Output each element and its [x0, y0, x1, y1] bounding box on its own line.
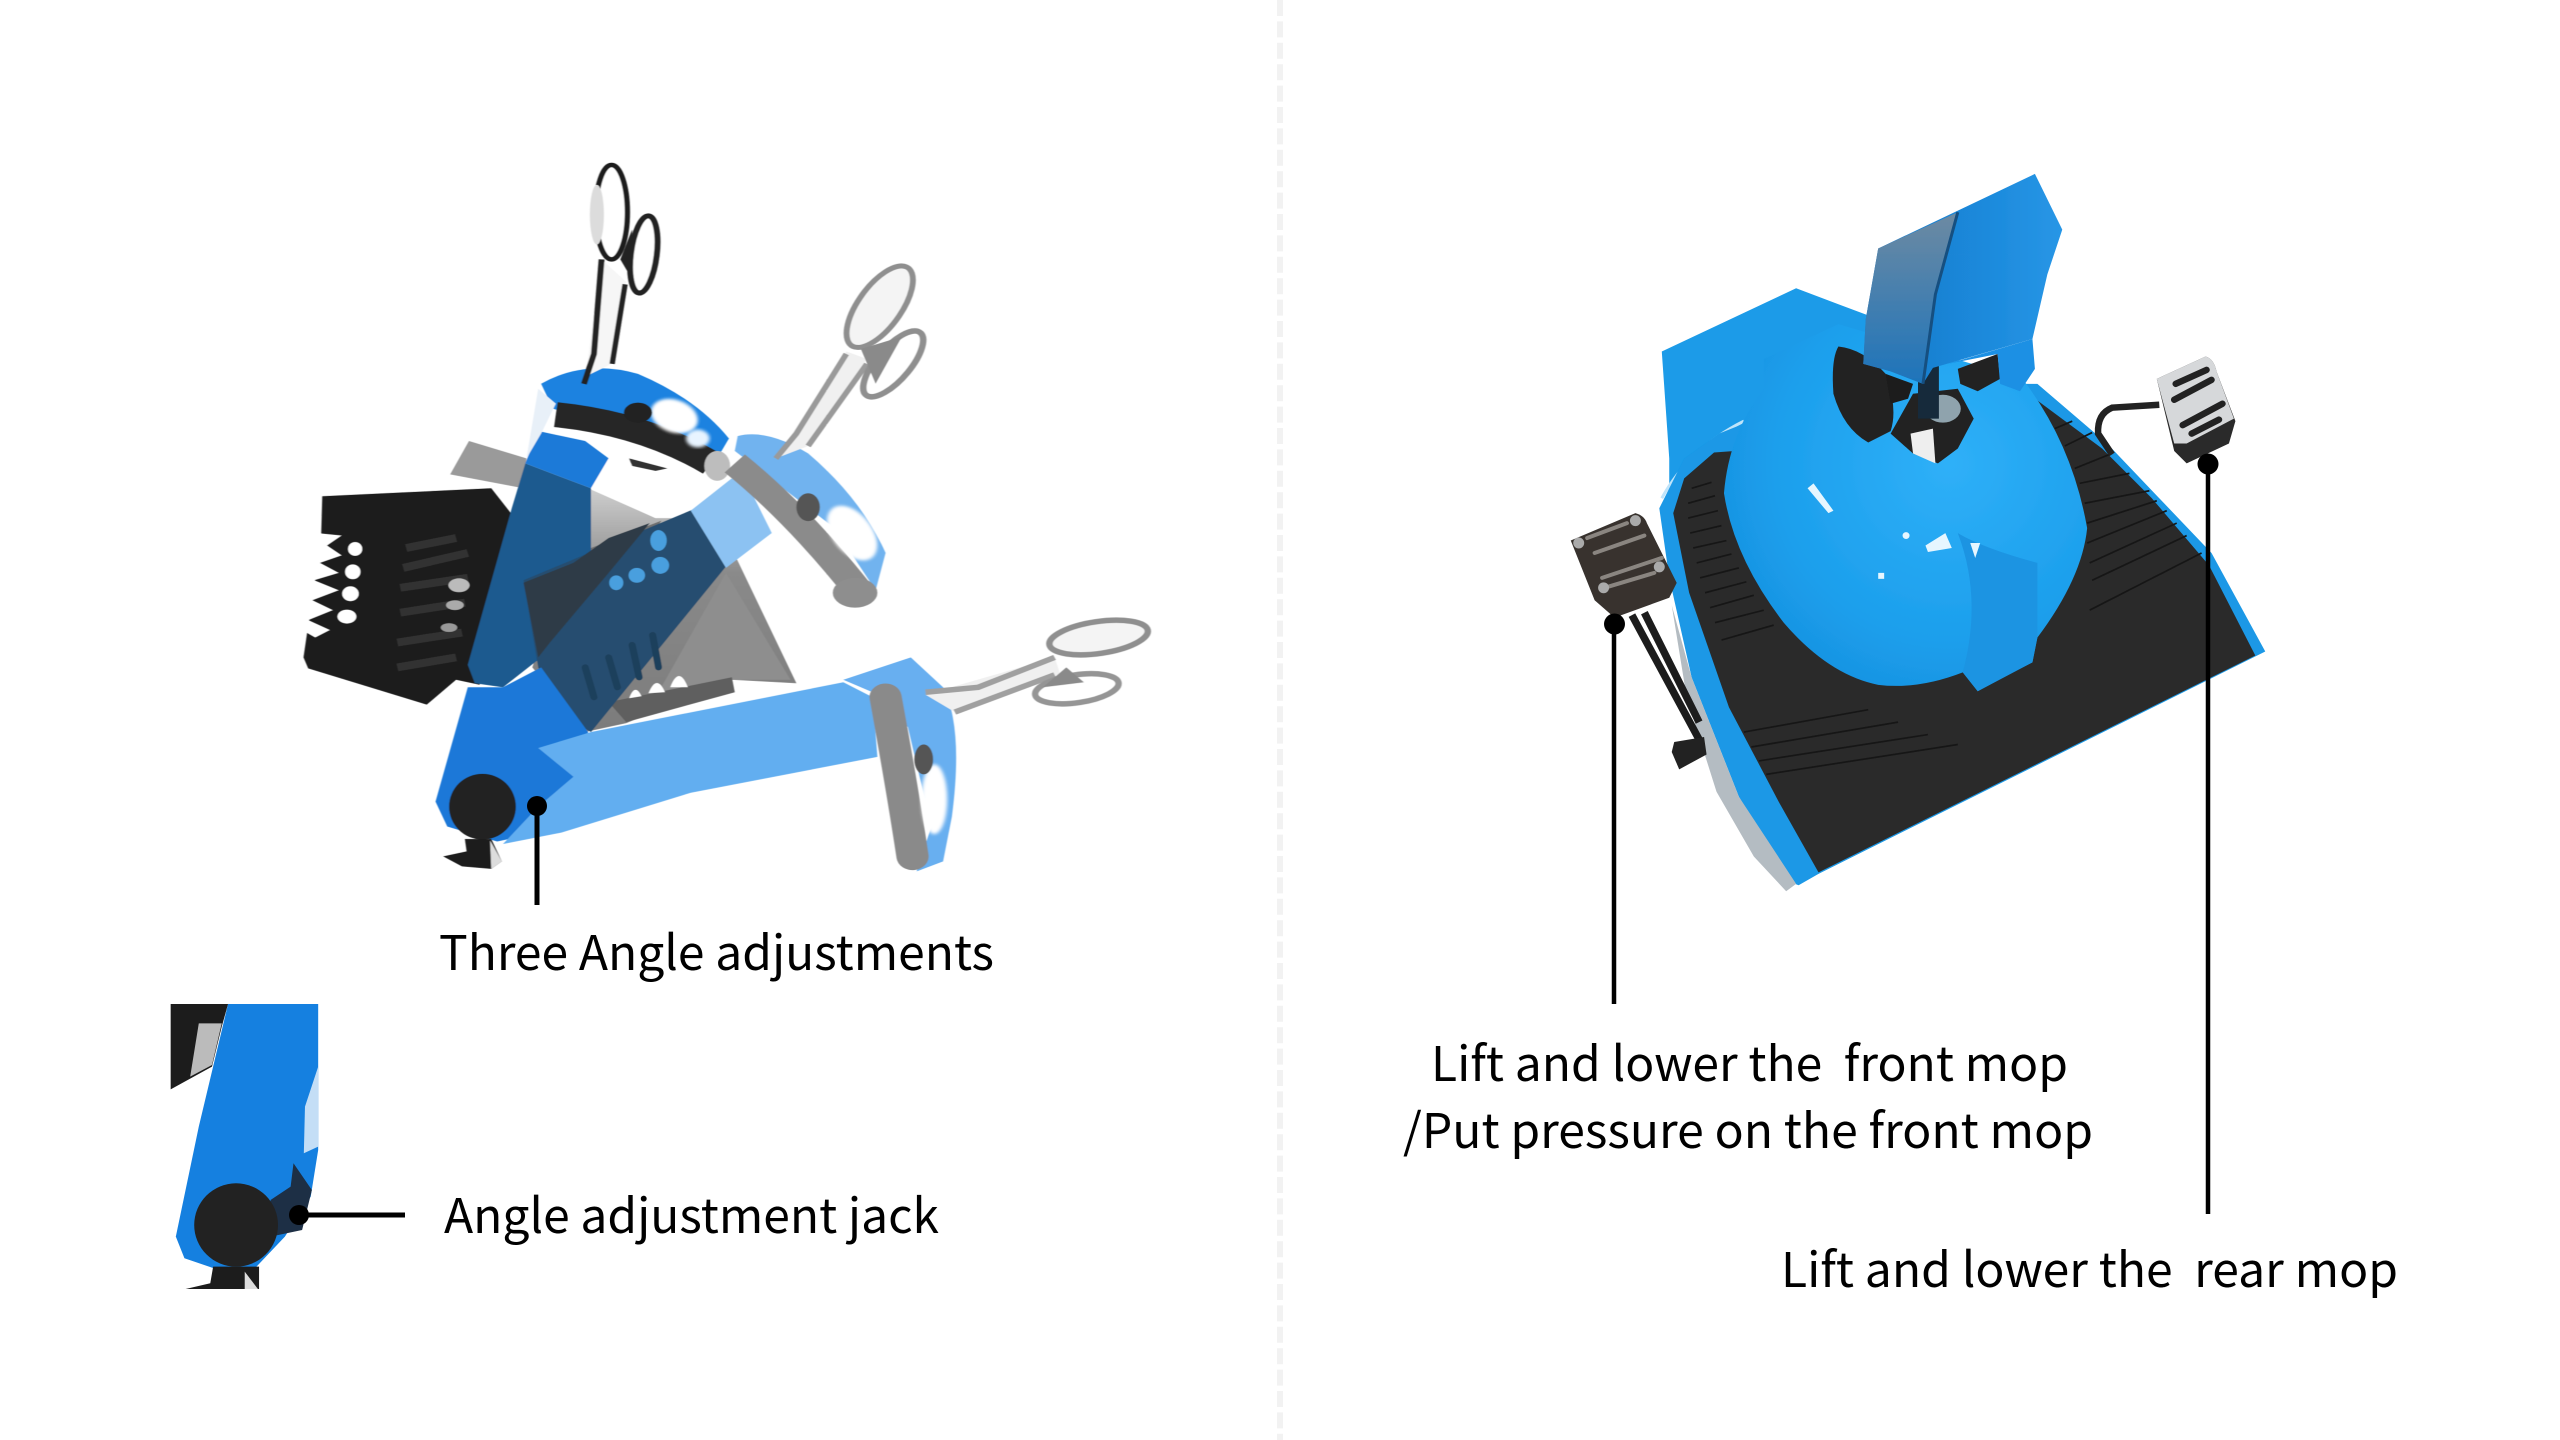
rear blue slab	[1662, 288, 1878, 498]
dark blue basket panel, upright position	[468, 463, 591, 687]
inset blue arm	[176, 1004, 318, 1270]
inset dark corner	[171, 1004, 228, 1089]
label: three angle adjustments: Three Angle adjustments	[439, 914, 994, 984]
black rear basket	[303, 488, 515, 705]
black ribbed mat	[1673, 391, 2255, 872]
deep blue lower arm, upright position	[436, 667, 588, 841]
dome centre seam	[1958, 533, 2037, 691]
light blue lower arm, flat position	[456, 682, 877, 844]
mid arm light blue section	[691, 478, 772, 568]
lower stalk and mirrors	[925, 614, 1151, 712]
white gap under top head	[591, 458, 691, 518]
base foot	[443, 839, 502, 869]
clear collar	[1925, 395, 1961, 423]
rear connector	[1958, 354, 2000, 391]
illustration: three handle angle positions	[303, 165, 1151, 871]
callout: rear mop pedal leader	[2198, 454, 2218, 1214]
dark teal basket panel, middle position	[524, 509, 729, 732]
middle stalk and mirrors	[776, 258, 934, 458]
white column cover	[1911, 429, 1935, 463]
inset knob	[194, 1183, 278, 1267]
label: rear mop: Lift and lower the rear mop	[1781, 1231, 2398, 1301]
callout: angle adjustment jack leader	[289, 1205, 405, 1225]
inset: angle adjustment jack close-up	[171, 1004, 318, 1289]
callout: three angle adjustments leader	[527, 796, 547, 905]
label: front mop: Lift and lower the front mop	[1431, 1025, 2068, 1095]
blue upright arm upper section	[525, 431, 609, 488]
rear pedal stalk	[2098, 405, 2159, 454]
inset foot highlight	[245, 1272, 258, 1289]
label: front mop: /Put pressure on the front mop	[1403, 1092, 2093, 1162]
grey mid basket	[532, 488, 796, 732]
chrome skirt	[1672, 605, 1796, 891]
label: angle adjustment jack: Angle adjustment jack	[444, 1177, 939, 1247]
front pedal	[1571, 513, 1677, 618]
shield backing	[1863, 174, 2062, 384]
inset bracket	[271, 1163, 312, 1237]
shield lower tab	[1948, 339, 2035, 391]
front pedal linkage	[1632, 613, 1699, 740]
mat blue rim	[1659, 384, 2265, 885]
blue dome	[1724, 324, 2087, 691]
linkage bolt	[1672, 737, 1707, 769]
slab light arc	[1662, 421, 1744, 498]
shield seam	[1923, 212, 1958, 384]
middle handle head, angled position	[735, 434, 888, 608]
mat ribs	[1688, 421, 2202, 774]
shield left smoked section	[1863, 212, 1958, 384]
inset foot	[186, 1267, 259, 1289]
dome highlights	[1808, 483, 1980, 579]
black adjustment knob	[1833, 347, 1913, 443]
top handle head, upright position	[526, 368, 730, 481]
inset highlight	[304, 1067, 318, 1153]
angle pivot knob	[449, 774, 516, 839]
label: front mop	[1403, 1025, 2093, 1162]
illustration: machine top with pedals	[1571, 174, 2265, 891]
column stem	[1918, 364, 1939, 419]
callout: front mop pedal leader	[1604, 614, 1625, 1004]
dashed centre divider	[1277, 0, 1283, 1440]
grey ghost of rear basket	[450, 441, 526, 488]
inset grey detail	[190, 1023, 222, 1077]
top stalk and mirrors	[584, 165, 661, 384]
lower handle head, flat position	[843, 657, 956, 871]
steering column opening	[1891, 389, 1974, 463]
rear pedal	[2157, 356, 2235, 463]
